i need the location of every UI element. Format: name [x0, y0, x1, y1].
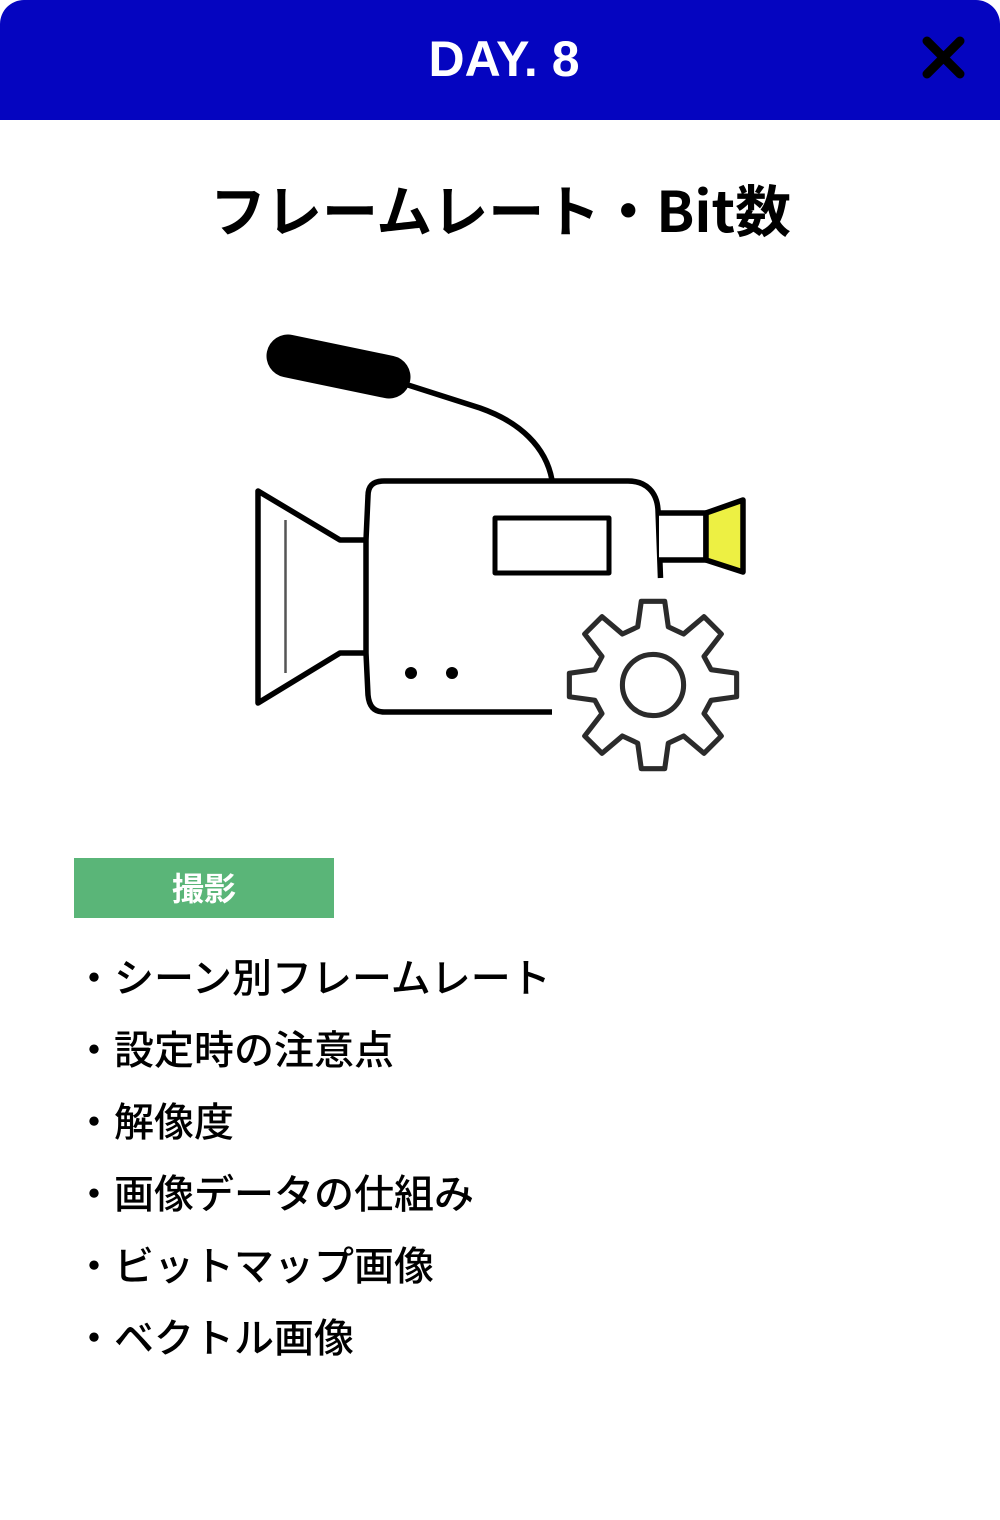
icon: video camera with gear — [255, 334, 746, 772]
list item: ・シーン別フレームレート — [74, 946, 551, 1004]
viewfinder — [659, 500, 743, 572]
list item: ・ベクトル画像 — [74, 1306, 354, 1364]
camera body — [366, 481, 660, 712]
display panel — [495, 518, 609, 573]
icon: close — [922, 36, 964, 78]
category tag: 撮影 — [172, 864, 236, 910]
list item: ・解像度 — [74, 1090, 234, 1148]
header bar — [0, 0, 1000, 120]
gear — [569, 601, 737, 769]
microphone — [288, 356, 552, 480]
list item: ・ビットマップ画像 — [74, 1234, 434, 1292]
title: フレームレート・Bit数 — [210, 168, 791, 249]
list item: ・設定時の注意点 — [74, 1018, 394, 1076]
list item: ・画像データの仕組み — [74, 1162, 474, 1220]
category tag — [74, 858, 334, 918]
indicator dots — [405, 667, 458, 679]
day label: DAY. 8 — [428, 31, 580, 87]
topic list — [74, 946, 551, 1364]
lens hood — [258, 491, 366, 703]
